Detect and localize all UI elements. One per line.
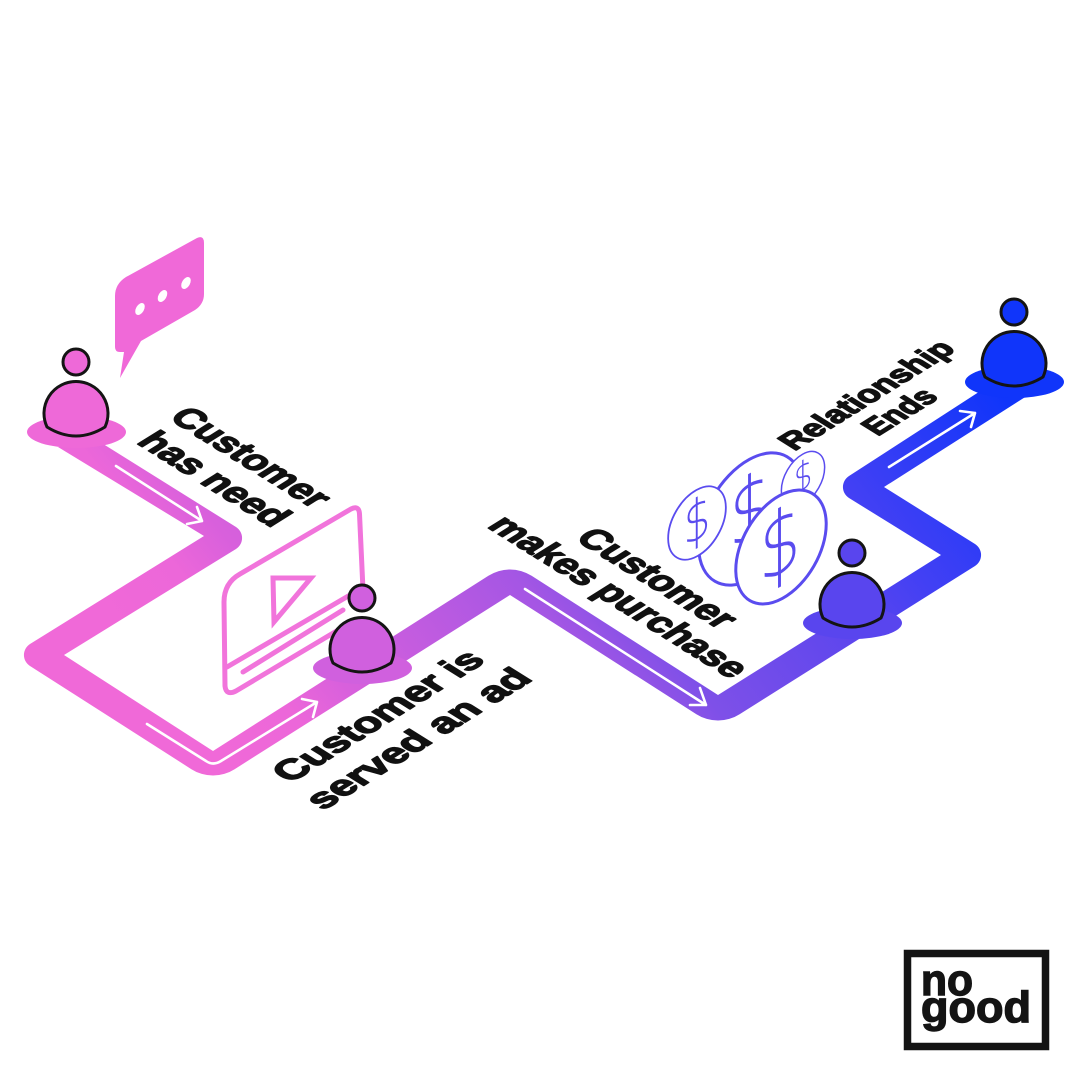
- arrow: customer has need: [116, 466, 202, 524]
- label: customer has need: [125, 400, 342, 536]
- logo: no good: no: [921, 956, 973, 1005]
- logo: no good: good: [921, 983, 1031, 1032]
- arrow: customer is served an ad: [147, 699, 317, 764]
- label: customer is served an ad: Customer is: [261, 643, 493, 788]
- icon: dollar coins: $: [759, 483, 801, 607]
- label: relationship ends: Ends: [853, 382, 946, 440]
- label: relationship ends: Relationship: [770, 335, 963, 455]
- label: customer is served an ad: served an ad: [294, 661, 541, 815]
- person 2: [313, 585, 412, 684]
- journey path: [24, 388, 1030, 776]
- icon: play triangle: [273, 578, 311, 622]
- person 3: [803, 540, 902, 639]
- label: customer has need: Customer: [161, 400, 342, 513]
- label: customer has need: has need: [129, 425, 301, 532]
- logo: no good: [908, 954, 1046, 1046]
- icon: dollar coins: $: [794, 448, 812, 505]
- arrow: relationship ends: [889, 411, 975, 467]
- person 1: [27, 349, 126, 448]
- arrow: customer makes purchase: [525, 589, 706, 705]
- label: customer makes purchase: makes purchase: [479, 509, 760, 684]
- icon: dollar coins: $: [729, 449, 771, 573]
- person 4: [965, 299, 1064, 398]
- icon: speech bubble: [115, 237, 204, 378]
- icon: dollar coins: [656, 435, 845, 620]
- icon: dollar coins: $: [684, 481, 710, 561]
- label: customer is served an ad: [256, 638, 541, 815]
- label: customer makes purchase: Customer: [567, 521, 748, 634]
- icon: video ad screen: [224, 508, 363, 693]
